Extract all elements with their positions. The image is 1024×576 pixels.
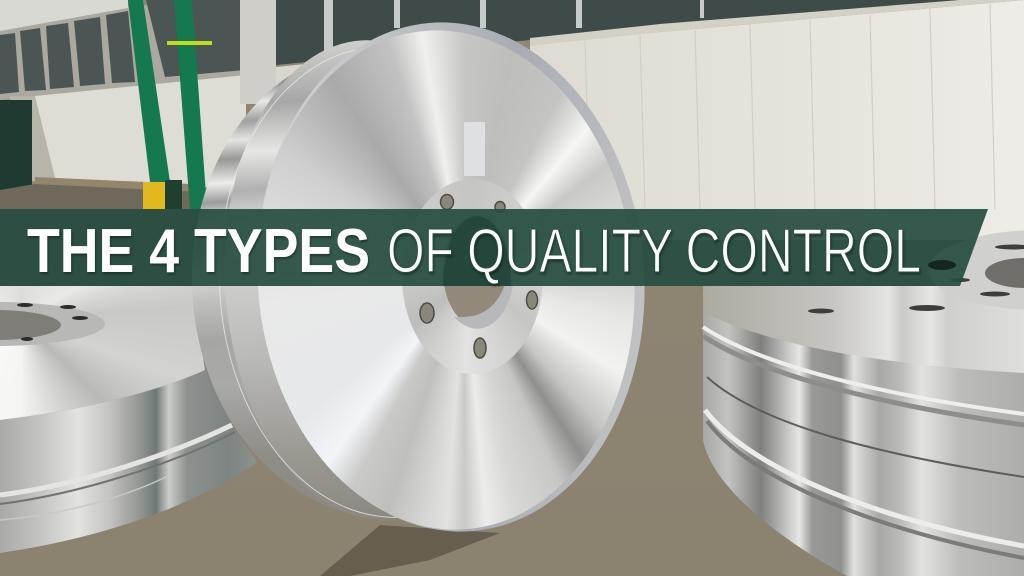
stack top surface [703,286,1024,373]
banner ribbon [0,209,988,286]
wheel side rim [180,38,586,528]
stack side wall [703,290,1024,576]
wheel rim connector [213,32,537,528]
wheel rim groove [207,37,571,527]
left disc top surface [0,286,205,420]
wheel outer lip [237,6,665,548]
stack raised hub [928,230,1024,310]
stack grooves [703,327,1024,414]
title: THE 4 TYPES [27,217,370,286]
wheel face [237,15,655,545]
hole showing through banner [928,260,956,270]
disc bright groove [0,425,232,495]
disc side wall [0,370,257,553]
bore shadow showing through banner [443,216,511,286]
bolt holes [420,194,538,358]
wheel hub [402,179,543,374]
title [27,217,921,286]
sticker [464,122,485,176]
stack bore [985,258,1024,288]
